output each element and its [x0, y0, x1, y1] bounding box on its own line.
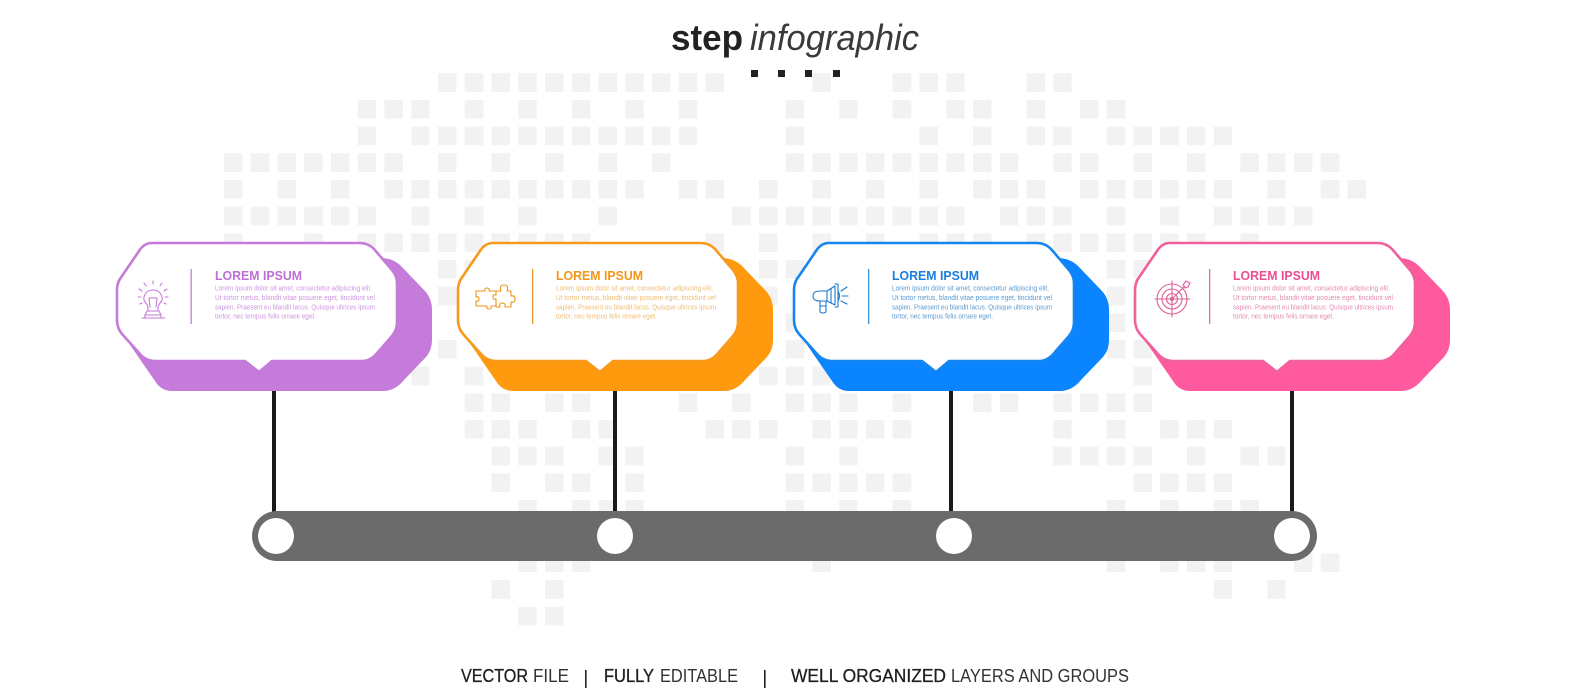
body text: Lorem ipsum dolor sit amet, consectetur adipiscing elit. [892, 284, 1049, 292]
body text: sapien. Praesent eu blandit lacus. Quisque ultrices ipsum [892, 302, 1052, 311]
heading: LOREM IPSUM [892, 268, 979, 283]
heading: LOREM IPSUM [556, 268, 643, 283]
body text [892, 284, 1052, 321]
body text [215, 284, 375, 321]
icon: megaphone [813, 284, 848, 313]
panel: step 4 pink [1135, 243, 1450, 391]
footer text [461, 666, 1129, 688]
footer text: FULLY [604, 666, 654, 686]
body text: Lorem ipsum dolor sit amet, consectetur adipiscing elit. [1233, 284, 1390, 292]
footer text: LAYERS AND GROUPS [951, 666, 1129, 686]
panel: step 2 orange [458, 243, 773, 391]
body text [556, 284, 716, 321]
title [671, 17, 919, 58]
body text: Lorem ipsum dolor sit amet, consectetur adipiscing elit. [215, 284, 372, 292]
body text: Ut tortor metus, blandit vitae posuere eget, tincidunt vel [1233, 293, 1393, 302]
icon: puzzle [476, 285, 515, 309]
panel: step 1 purple [117, 243, 432, 391]
divider [532, 269, 533, 324]
body text: tortor, nec tempus felis ornare eget. [215, 312, 316, 321]
footer text: VECTOR [461, 666, 528, 686]
divider [868, 269, 869, 324]
title: step [671, 17, 743, 58]
body text: tortor, nec tempus felis ornare eget. [556, 312, 657, 321]
footer text: WELL ORGANIZED [791, 666, 946, 686]
title: infographic [750, 17, 919, 58]
body text: Ut tortor metus, blandit vitae posuere eget, tincidunt vel [892, 293, 1052, 302]
heading: LOREM IPSUM [215, 268, 302, 283]
connector lines [272, 388, 1294, 515]
body text [1233, 284, 1393, 321]
panel: step 3 blue [794, 243, 1109, 391]
title dots [751, 70, 840, 77]
divider [190, 269, 192, 324]
heading: LOREM IPSUM [1233, 268, 1320, 283]
body text: tortor, nec tempus felis ornare eget. [892, 312, 993, 321]
icon: target [1155, 281, 1190, 317]
body text: Ut tortor metus, blandit vitae posuere eget, tincidunt vel [215, 293, 375, 302]
icon: light bulb [138, 281, 168, 318]
footer text: EDITABLE [660, 666, 738, 686]
body text: sapien. Praesent eu blandit lacus. Quisque ultrices ipsum [215, 302, 375, 311]
timeline bar [252, 511, 1317, 561]
background pixel world map [224, 73, 1366, 625]
body text: tortor, nec tempus felis ornare eget. [1233, 312, 1334, 321]
body text: Lorem ipsum dolor sit amet, consectetur adipiscing elit. [556, 284, 713, 292]
body text: Ut tortor metus, blandit vitae posuere eget, tincidunt vel [556, 293, 716, 302]
footer text: FILE [533, 666, 569, 686]
body text: sapien. Praesent eu blandit lacus. Quisque ultrices ipsum [556, 302, 716, 311]
divider [1209, 269, 1210, 324]
body text: sapien. Praesent eu blandit lacus. Quisque ultrices ipsum [1233, 302, 1393, 311]
